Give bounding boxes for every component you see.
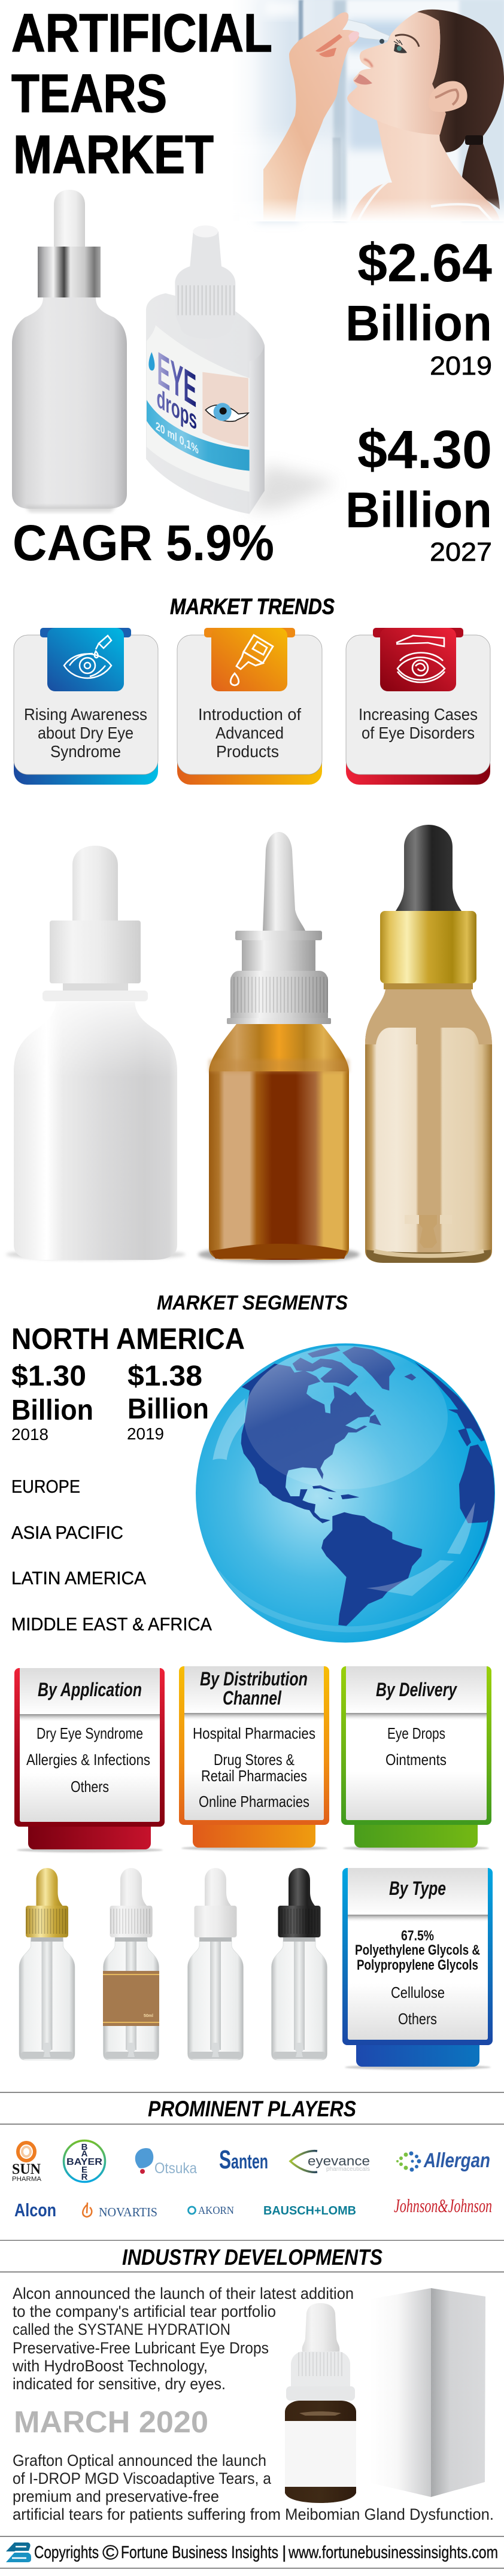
panel: advanced products (177, 628, 322, 785)
footer (6, 2541, 498, 2564)
panel: by type: 67.5% (401, 1928, 434, 1944)
logo: bayer: R (81, 2172, 88, 2182)
logo: eyevance (290, 2151, 370, 2173)
stat: 2027 market size: Billion (345, 482, 492, 538)
arm and hand (263, 12, 359, 221)
icon: eye drops tube: 20 ml 0,1% (156, 420, 199, 457)
lips (354, 74, 372, 84)
icon: plain white cap bottle (188, 1868, 243, 2060)
stat: 2027 market size: $4.30 (357, 420, 492, 480)
icon: black cap bottle (272, 1868, 327, 2060)
stat: 2027 market size (345, 420, 492, 567)
logo: novartis: NOVARTIS (99, 2205, 157, 2219)
panel: by delivery: Ointments (385, 1751, 447, 1769)
icon: dropper bottle (230, 635, 273, 685)
text: grafton announcement: of I-DROP MGD Viscoadaptive Tears, a (13, 2469, 272, 2487)
text: of Eye Disorders (362, 724, 475, 742)
logo: novartis (83, 2203, 157, 2219)
panel: by distribution channel (179, 1666, 329, 1851)
continents (241, 1347, 498, 1626)
panel: eye disorders (346, 628, 490, 785)
region: north america: Billion (11, 1395, 93, 1426)
copyright text: | (282, 2543, 287, 2562)
icon: eye drops tube (146, 226, 337, 514)
title: MARKET (13, 125, 214, 185)
heading: market segments: MARKET SEGMENTS (157, 1292, 348, 1314)
heading: market trends: MARKET TRENDS (170, 594, 335, 619)
text: Products (216, 742, 279, 761)
panel: by type: Cellulose (391, 1983, 445, 2001)
atmosphere highlight (212, 1345, 475, 1629)
logo: sun pharma (12, 2143, 42, 2183)
logo: allergan: Allergan (423, 2149, 490, 2172)
stat: 2019 market size: 2019 (430, 351, 492, 381)
panel: by distribution channel: Online Pharmacies (199, 1793, 309, 1811)
panel: by application: By Application (38, 1679, 142, 1700)
logo: santen: Santen (219, 2145, 268, 2174)
stat: 2027 market size: 2027 (430, 537, 492, 567)
panel: by type: Others (398, 2010, 437, 2028)
neck and shoulders (350, 102, 500, 221)
text: Syndrome (50, 742, 121, 761)
text: alcon announcement: Preservative-Free Lubricant Eye Drops (13, 2339, 269, 2357)
logo: sun pharma: PHARMA (12, 2176, 42, 2183)
icon: eye drops tube: EYE (157, 341, 196, 418)
text: Introduction of (198, 705, 301, 724)
logo: eyevance: pharmaceuticals (326, 2166, 370, 2173)
text: Rising Awareness (24, 705, 147, 724)
panel: by distribution channel: Channel (223, 1687, 282, 1709)
copyright text (34, 2541, 498, 2564)
region: north america: $1.30 (11, 1360, 86, 1392)
text: alcon announcement: Alcon announced the launch of their latest addition (13, 2285, 354, 2302)
logo: alcon: Alcon (14, 2200, 56, 2220)
text: alcon announcement: with HydroBoost Technology, (12, 2357, 208, 2375)
title: ARTIFICIAL (11, 4, 272, 63)
title: TEARS (11, 64, 167, 124)
region: north america (11, 1322, 245, 1444)
icon: eye with dropper (64, 636, 111, 678)
panel: rising awareness (14, 628, 158, 785)
eye graphic (205, 403, 248, 421)
text: Advanced (215, 724, 284, 742)
icon: gold cap bottle (19, 1868, 75, 2060)
panel: by delivery: Eye Drops (387, 1724, 445, 1742)
logo: bayer: E (81, 2165, 87, 2175)
logo: bayer (63, 2140, 105, 2182)
ponytail and hair (417, 10, 504, 209)
logo: allergan (396, 2149, 490, 2172)
region list (11, 1476, 212, 1635)
illustration: product box (369, 2288, 485, 2497)
region: north america: $1.38 (127, 1360, 202, 1392)
panel: by distribution channel: Retail Pharmacies (201, 1767, 307, 1785)
ear (429, 81, 467, 112)
text: grafton announcement: Grafton Optical announced the launch (13, 2452, 266, 2469)
logo: otsuka: Otsuka (154, 2160, 197, 2177)
copyright text: Copyrights (34, 2543, 99, 2562)
illustration: brown bottle (285, 2303, 356, 2503)
stat: 2019 market size (345, 233, 492, 381)
logo: akorn: AKORN (198, 2204, 234, 2216)
panel: by application: Allergies & Infections (26, 1751, 150, 1769)
logo: fortune business insights (6, 2542, 31, 2562)
photo: woman applying eye drops (162, 0, 504, 221)
region: north america: NORTH AMERICA (11, 1322, 245, 1356)
icon: white ribbed cap bottle with brown label: 50ml (144, 2014, 153, 2018)
text: alcon announcement: indicated for sensitive, dry eyes. (13, 2375, 226, 2393)
date: march 2020: MARCH 2020 (14, 2405, 208, 2439)
text (24, 705, 147, 761)
copyright text: Fortune Business Insights (121, 2543, 278, 2562)
illustration: gold and black dropper bottle (365, 825, 492, 1263)
text: alcon announcement (12, 2285, 354, 2393)
eye dropper vial (341, 20, 390, 41)
region list: LATIN AMERICA (11, 1568, 146, 1588)
heading: industry developments: INDUSTRY DEVELOPMENTS (122, 2245, 382, 2270)
region: north america: Billion (127, 1393, 209, 1425)
stat: 2019 market size: Billion (345, 295, 492, 351)
panel: by type (342, 1868, 493, 2070)
region: north america: 2019 (127, 1424, 164, 1443)
panel: by application: Dry Eye Syndrome (37, 1724, 143, 1742)
illustration: amber dropper bottle (198, 832, 360, 1263)
logo: bausch and lomb: BAUSCH+LOMB (263, 2204, 356, 2217)
panel: by delivery (341, 1666, 491, 1851)
cap (175, 232, 235, 339)
region list: MIDDLE EAST & AFRICA (11, 1614, 212, 1635)
logo: bayer: BAYER (66, 2157, 102, 2167)
panel: by application (14, 1668, 165, 1852)
text: alcon announcement: called the SYSTANE HYDRATION (13, 2320, 230, 2338)
title (11, 4, 272, 185)
panel: by application: Others (71, 1778, 109, 1796)
heading: prominent players: PROMINENT PLAYERS (148, 2097, 356, 2121)
copyright text: © (102, 2541, 119, 2564)
icon: globe (196, 1343, 498, 1642)
region: north america: 2018 (11, 1425, 48, 1444)
logo: eyevance: eyevance (308, 2153, 370, 2168)
logo: bayer: B (81, 2142, 88, 2152)
text: Increasing Cases (359, 705, 478, 724)
panel: by distribution channel: Hospital Pharmacies (193, 1724, 315, 1742)
panel: by distribution channel: Drug Stores & (214, 1751, 294, 1769)
strap (358, 181, 492, 221)
nostril (364, 59, 372, 67)
logo: sun pharma: SUN (12, 2161, 41, 2177)
text: alcon announcement: to the company's artificial tear portfolio (13, 2302, 276, 2320)
logo: bayer: A (81, 2149, 88, 2159)
text (359, 705, 478, 742)
stat: CAGR: CAGR 5.9% (13, 515, 274, 571)
text: about Dry Eye (38, 724, 133, 742)
panel: by distribution channel: By Distribution (200, 1668, 308, 1690)
region list: EUROPE (11, 1476, 80, 1497)
text (198, 705, 301, 761)
icon: white ribbed cap bottle with brown label (103, 1868, 159, 2060)
panel: by type: By Type (389, 1878, 446, 1899)
icon: eye drops tube: drops (157, 382, 197, 436)
icon: frosted dropper bottle (12, 190, 127, 512)
text: grafton announcement: premium and preservative-free (13, 2487, 219, 2505)
face (347, 12, 446, 135)
illustration: white dropper bottle (6, 846, 186, 1260)
eye and brow (395, 35, 419, 47)
panel: by delivery: By Delivery (376, 1679, 458, 1700)
icon: drop (148, 352, 154, 370)
stat: 2019 market size: $2.64 (357, 233, 492, 293)
logo: otsuka (135, 2148, 197, 2177)
text: grafton announcement (13, 2452, 494, 2523)
icon: red eye (396, 636, 445, 682)
region list: ASIA PACIFIC (11, 1522, 123, 1543)
